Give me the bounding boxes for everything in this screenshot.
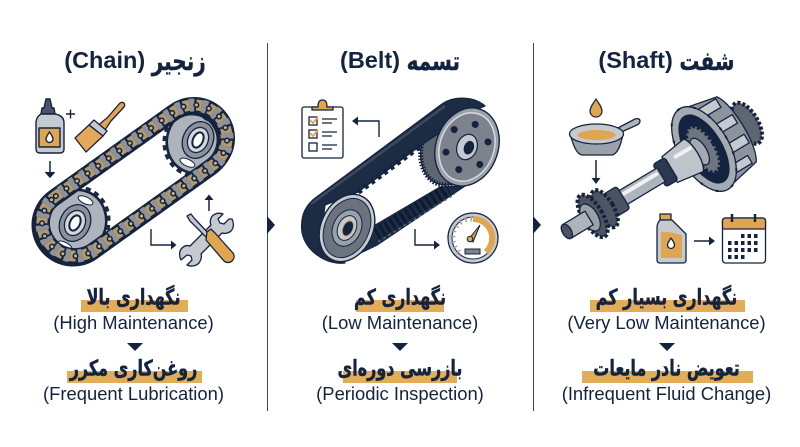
illustration: belt drive with maintenance icons: [300, 98, 500, 264]
icon: oil pan: [570, 119, 640, 155]
front gear: [586, 186, 623, 231]
heading: belt: (Belt): [340, 47, 400, 73]
arrow: belt to shaft: [533, 216, 541, 234]
arrow: very low maintenance to fluid change: [659, 343, 675, 351]
rear gear: [726, 98, 768, 149]
highlight: periodic inspection: [343, 371, 457, 383]
label: infrequent fluid change persian: تعویض نادر مایعات: [593, 356, 740, 381]
icon: brush: [75, 102, 125, 152]
arrowhead: pan to shaft: [592, 178, 600, 184]
panel: shaft: [560, 45, 771, 404]
upper strand with outer wrap: [302, 98, 485, 263]
label: frequent lubrication english: (Frequent Lubrication): [43, 383, 224, 404]
icon: inspection clipboard: [302, 100, 343, 158]
arrow: high maintenance to lubrication: [127, 343, 143, 351]
arrowhead: jug to calendar: [709, 236, 715, 246]
front collar: [601, 186, 630, 218]
arrow: bottle to chain: [46, 161, 54, 177]
icon: plus: [66, 110, 75, 118]
lower strand: [350, 186, 465, 258]
illustration: drive shaft with maintenance icons: [560, 96, 766, 264]
chain loop: [31, 95, 242, 268]
label: frequent lubrication persian: روغن‌کاری مکرر: [70, 356, 197, 381]
label: infrequent fluid change english: (Infrequent Fluid Change): [562, 383, 771, 404]
label: periodic inspection persian: بازرسی دوره‌ای: [338, 356, 462, 381]
arrow: chain to tools: [151, 229, 175, 245]
highlight: high maintenance: [81, 300, 188, 312]
arrowhead: tools to chain: [204, 194, 214, 200]
label: high maintenance english: (High Maintenance): [53, 312, 214, 333]
arrow: pan to shaft: [595, 160, 597, 180]
arrowhead: belt to clipboard: [352, 116, 358, 126]
panel: chain: [31, 45, 236, 404]
heading: chain: (Chain): [64, 47, 145, 73]
heading: shaft: شفت: [679, 45, 735, 77]
heading: shaft: [598, 45, 735, 77]
icon: fluid jug: [657, 214, 686, 263]
timing belt: [302, 98, 510, 271]
housing ribs: [692, 96, 759, 177]
arrow: belt to gauge: [415, 229, 438, 245]
highlight: low maintenance: [356, 300, 444, 312]
housing flange: [658, 96, 750, 202]
spline end: [563, 211, 593, 238]
big pulley face: [424, 99, 510, 195]
heading: shaft: (Shaft): [598, 47, 673, 73]
label: low maintenance english: (Low Maintenance): [322, 312, 478, 333]
illustration: chain drive with maintenance icons: [31, 97, 236, 267]
label: very low maintenance persian: نگهداری بسیار کم: [596, 284, 737, 310]
highlight: infrequent fluid change: [582, 371, 753, 383]
heading: chain: زنجیر: [152, 45, 206, 77]
arrowhead: belt to gauge: [434, 240, 440, 250]
arrow: belt to clipboard: [354, 121, 379, 137]
divider: chain to belt: [267, 43, 268, 411]
small pulley face: [309, 185, 385, 271]
heading: belt: تسمه: [407, 45, 460, 77]
divider: belt to shaft: [533, 43, 534, 411]
arrow: jug to calendar: [694, 240, 712, 242]
arrowhead: chain to tools: [171, 240, 176, 250]
icon: calendar: [722, 214, 766, 263]
label: periodic inspection english: (Periodic Inspection): [316, 383, 484, 404]
icon: crossed wrench and screwdriver: [180, 213, 234, 266]
highlight: frequent lubrication: [67, 371, 202, 383]
icon: oil drop: [590, 99, 602, 117]
sprocket: lower left: [31, 178, 119, 268]
label: very low maintenance english: (Very Low Maintenance): [567, 312, 766, 333]
housing body: [680, 86, 767, 188]
drive shaft: [539, 77, 780, 274]
label: low maintenance persian: نگهداری کم: [354, 284, 446, 310]
arrow: tools to chain: [208, 197, 210, 211]
arrow: low maintenance to inspection: [392, 343, 408, 351]
arrow: chain to belt: [267, 216, 275, 234]
label: high maintenance persian: نگهداری بالا: [86, 284, 180, 310]
big pulley teeth: [410, 100, 492, 194]
sprocket: upper right: [154, 95, 242, 185]
shaft tube: [618, 168, 665, 205]
icon: oil bottle: [36, 99, 64, 153]
heading: chain: [64, 45, 206, 77]
highlight: very low maintenance: [590, 300, 745, 312]
heading: belt: [340, 45, 460, 77]
flange collar: [660, 137, 707, 186]
panel: belt: [300, 45, 500, 404]
icon: gauge: [448, 213, 498, 263]
